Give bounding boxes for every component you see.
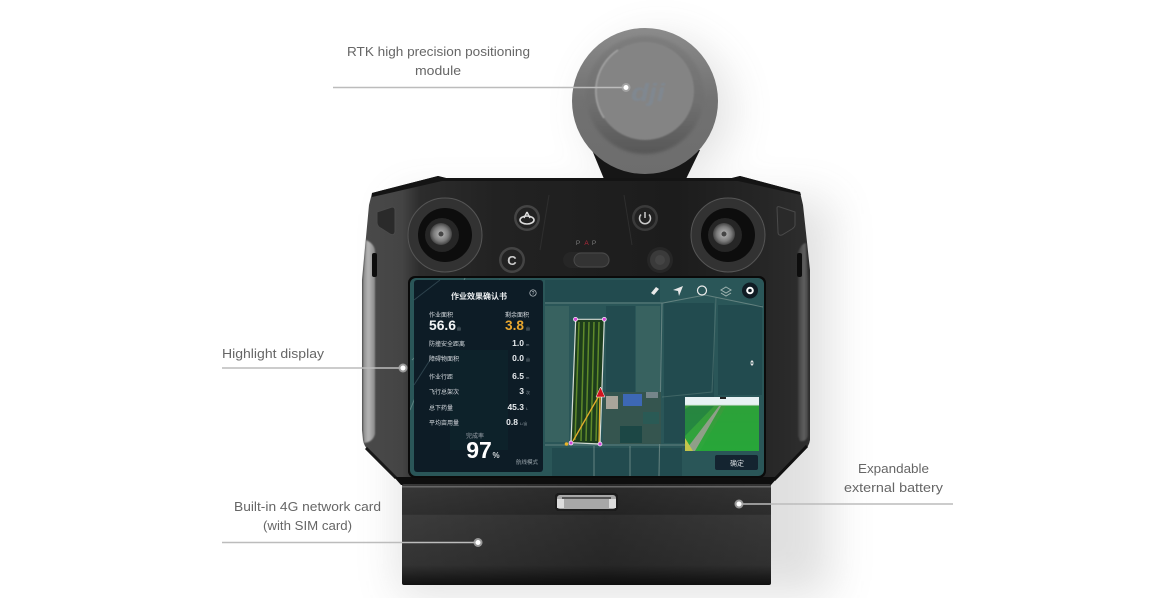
P A P flight mode switch <box>563 240 610 268</box>
confirm button <box>715 455 758 470</box>
P A P flight mode switch: A <box>584 240 589 247</box>
video preview <box>685 396 759 451</box>
stat rows: 总下药量 <box>429 404 453 412</box>
completion rate: % <box>492 451 500 460</box>
remaining area stat <box>505 312 530 331</box>
satellite map <box>410 278 764 476</box>
callout: RTK module <box>333 44 630 92</box>
stat rows: m <box>526 342 530 347</box>
callout: highlight display <box>222 346 408 372</box>
controller body <box>362 176 810 485</box>
P A P flight mode switch: P <box>576 240 580 247</box>
stat rows: 次 <box>526 389 530 395</box>
stat rows: 3 <box>519 386 524 396</box>
stat rows: 0.8 <box>506 417 518 427</box>
P A P flight mode switch: P <box>592 240 596 247</box>
left joystick <box>408 198 482 272</box>
stat rows: L/亩 <box>520 420 527 426</box>
confirm button: 确定 <box>730 458 744 468</box>
remaining area stat: 亩 <box>526 325 530 331</box>
stat rows: 飞行总架次 <box>429 388 459 396</box>
five-way button <box>647 247 673 273</box>
stat rows: 亩 <box>526 356 530 362</box>
work area stat: 56.6 <box>429 318 456 333</box>
remaining area stat: 3.8 <box>505 318 524 333</box>
stat rows: 防撞安全距离 <box>429 340 465 348</box>
completion rate: 航线模式 <box>516 458 538 466</box>
completion rate <box>466 432 538 466</box>
stat rows: 平均亩用量 <box>429 419 459 427</box>
stat rows <box>429 338 530 427</box>
help icon: ? <box>532 291 535 297</box>
farm buildings <box>603 392 661 444</box>
work area stat: 亩 <box>457 325 461 331</box>
stat rows: 45.3 <box>507 402 524 412</box>
callout: highlight display: Highlight display <box>222 346 325 361</box>
side light strip left <box>363 240 375 443</box>
callout: RTK module: RTK high precision positioning <box>347 44 530 59</box>
expandable external battery <box>402 484 771 585</box>
help icon <box>530 290 536 297</box>
side light strip right <box>798 243 808 441</box>
return to home button <box>514 205 540 231</box>
callout: 4G network card <box>222 499 482 547</box>
battery latch <box>555 493 618 511</box>
stat rows: L <box>526 406 529 411</box>
mission report panel <box>414 280 543 472</box>
work area stat <box>429 312 461 331</box>
remaining area stat: 剩余面积 <box>505 311 529 319</box>
C button <box>499 247 525 273</box>
dji logo on module: dji <box>631 79 666 107</box>
stat rows: 1.0 <box>512 338 524 348</box>
panel title: 作业效果确认书 <box>451 291 507 301</box>
power button <box>632 205 658 231</box>
callout: external battery: Expandable <box>858 461 929 476</box>
sprayed field plot with route <box>565 317 606 446</box>
stat rows: 6.5 <box>512 371 524 381</box>
stat rows: m <box>526 375 530 380</box>
right joystick <box>691 198 765 272</box>
stat rows: 0.0 <box>512 353 524 363</box>
callout: external battery: external battery <box>844 480 944 495</box>
highlight display screen <box>408 276 766 478</box>
stat rows: 作业行距 <box>429 373 453 381</box>
side wheels <box>372 253 802 277</box>
drop shadow <box>400 40 830 595</box>
callout: RTK module: module <box>415 63 461 78</box>
completion rate: 完成率 <box>466 432 484 440</box>
callout: external battery <box>734 461 953 508</box>
infographic scene <box>222 28 953 598</box>
callout: 4G network card: (with SIM card) <box>263 518 352 533</box>
work area stat: 作业面积 <box>429 311 453 319</box>
map toolbar icons <box>651 282 758 366</box>
callout: 4G network card: Built-in 4G network card <box>234 499 381 514</box>
RTK positioning module <box>572 28 718 179</box>
shoulder buttons <box>377 207 795 235</box>
C button: C <box>507 253 517 268</box>
completion rate: 97 <box>466 437 492 463</box>
stat rows: 障碍物面积 <box>429 355 459 363</box>
